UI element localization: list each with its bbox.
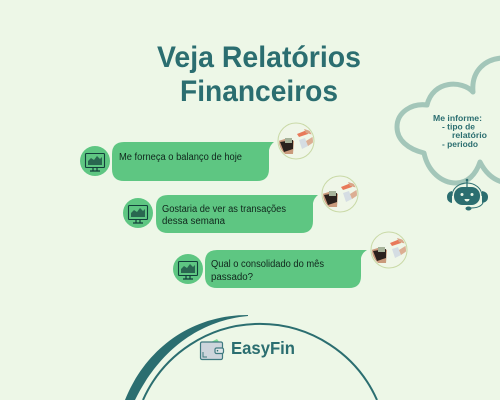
speech bubble 3: [205, 250, 367, 288]
message 3: passado?: [211, 272, 254, 283]
speech bubble 2: [156, 195, 318, 233]
avatar photo 2: [322, 176, 358, 212]
icon: monitor chart 2: [123, 198, 153, 228]
chat row 1: [80, 123, 314, 181]
title: Financeiros: [180, 75, 338, 108]
message 2: Gostaria de ver as transações: [162, 204, 286, 215]
icon: monitor chart 3: [173, 254, 203, 284]
cloud text: [433, 113, 487, 149]
cloud text: - tipo de: [442, 122, 475, 132]
message 3: [211, 259, 324, 283]
cloud text: relatório: [452, 130, 487, 140]
message 1: Me forneça o balanço de hoje: [119, 152, 242, 163]
logo: EasyFin: [200, 338, 295, 360]
title: Veja Relatórios: [157, 41, 361, 74]
avatar photo 3: [371, 232, 407, 268]
decorative thin arc: [143, 324, 377, 400]
speech bubble 1: [112, 142, 274, 181]
icon: monitor chart 1: [80, 146, 110, 176]
message 2: [162, 204, 286, 227]
title: [157, 41, 361, 108]
cloud text: - periodo: [442, 139, 478, 149]
avatar photo 1: [278, 123, 314, 159]
message 3: Qual o consolidado do mês: [211, 259, 324, 270]
brand name: EasyFin: [231, 338, 295, 358]
icon: wallet: [200, 339, 224, 360]
chat row 3: [173, 232, 407, 288]
icon: robot assistant: [447, 179, 488, 210]
decorative thick arc: [125, 315, 248, 400]
cloud text: Me informe:: [433, 113, 482, 123]
thought cloud: [397, 58, 500, 183]
message 2: dessa semana: [162, 216, 226, 227]
chat row 2: [123, 176, 358, 233]
